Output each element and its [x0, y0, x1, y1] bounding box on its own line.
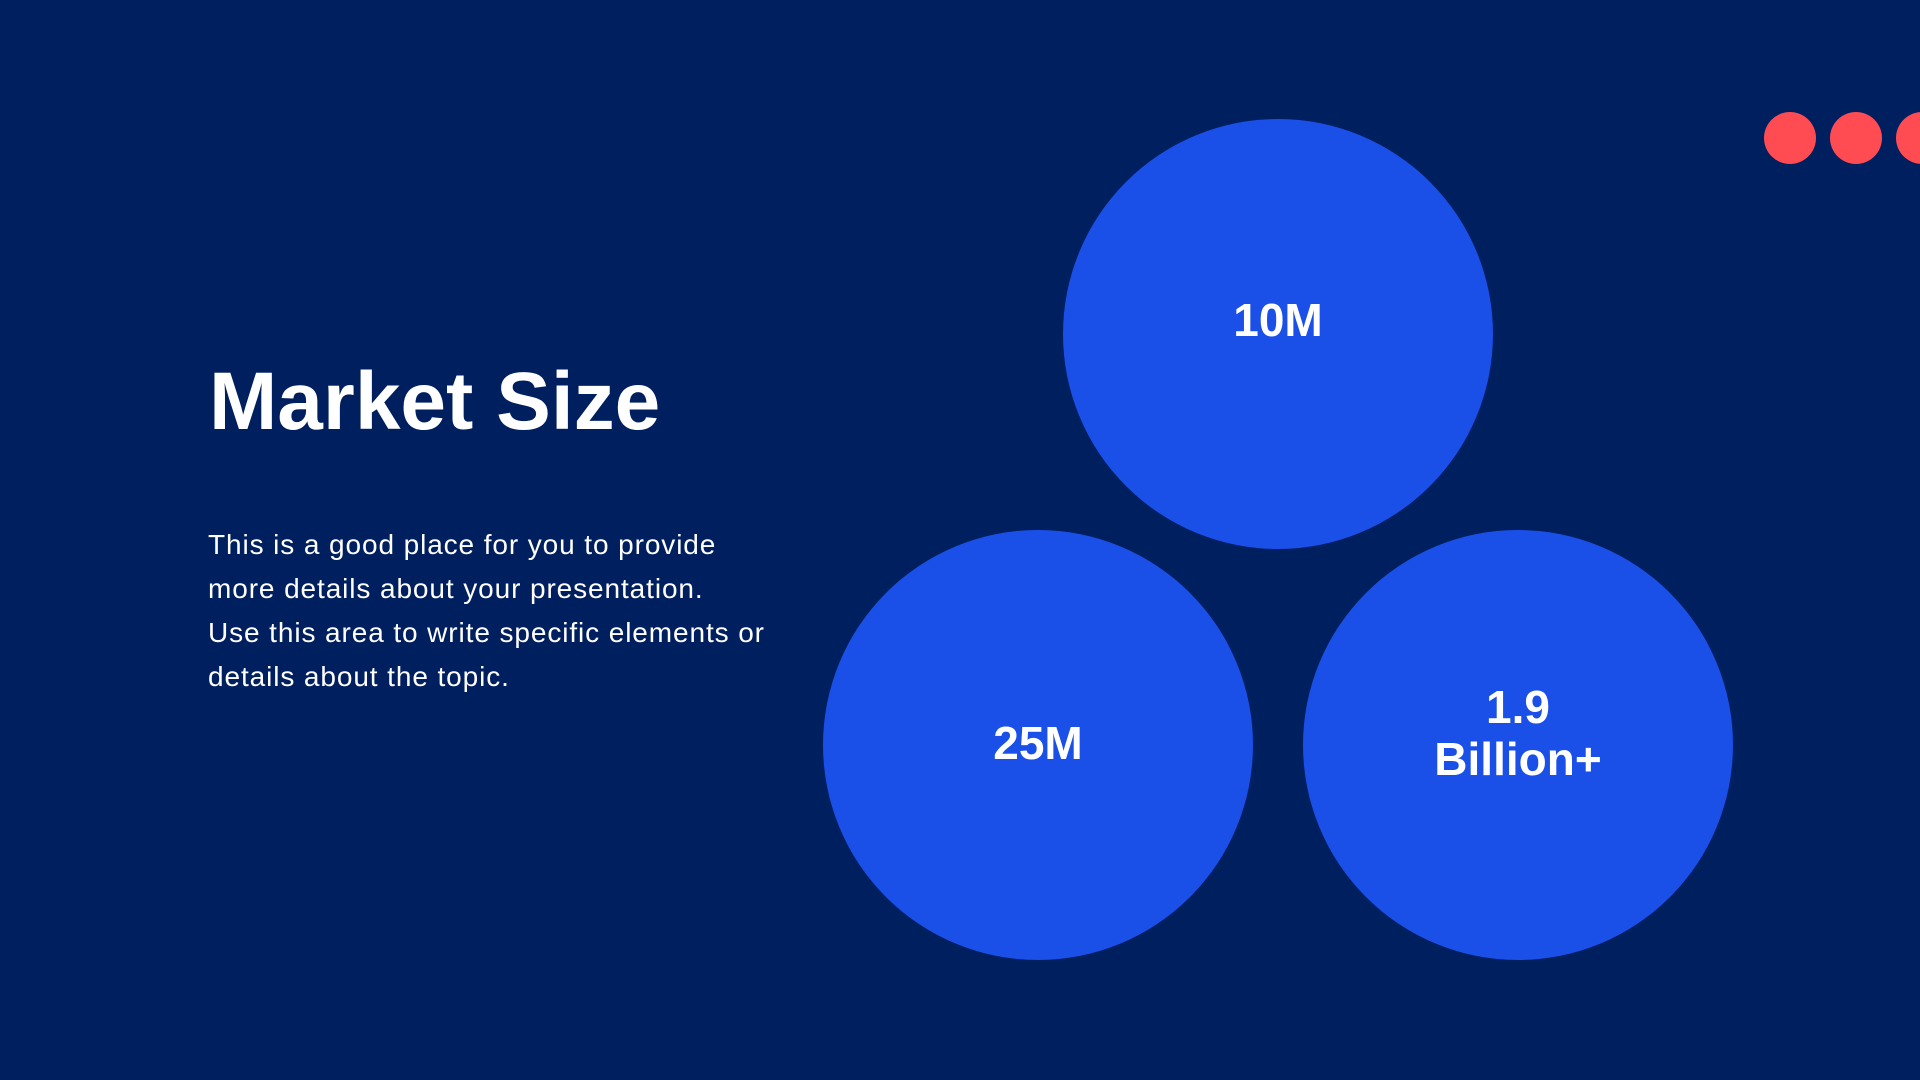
title: Market Size — [209, 356, 660, 447]
body text: more details about your presentation. — [208, 573, 704, 604]
circle: 10M — [1063, 119, 1493, 549]
circle: 25M: 25M — [993, 717, 1083, 769]
decoration: red dots — [1764, 112, 1920, 164]
body text — [208, 529, 765, 692]
body text: details about the topic. — [208, 661, 510, 692]
body text: This is a good place for you to provide — [208, 529, 716, 560]
circle: 10M: 10M — [1233, 294, 1323, 346]
body text: Use this area to write specific elements or — [208, 617, 765, 648]
circle: 1.9 Billion+ — [1303, 530, 1733, 960]
circle: 1.9 Billion+: 1.9 — [1486, 681, 1550, 733]
circle: 25M — [823, 530, 1253, 960]
circle: 1.9 Billion+: Billion+ — [1434, 733, 1602, 785]
